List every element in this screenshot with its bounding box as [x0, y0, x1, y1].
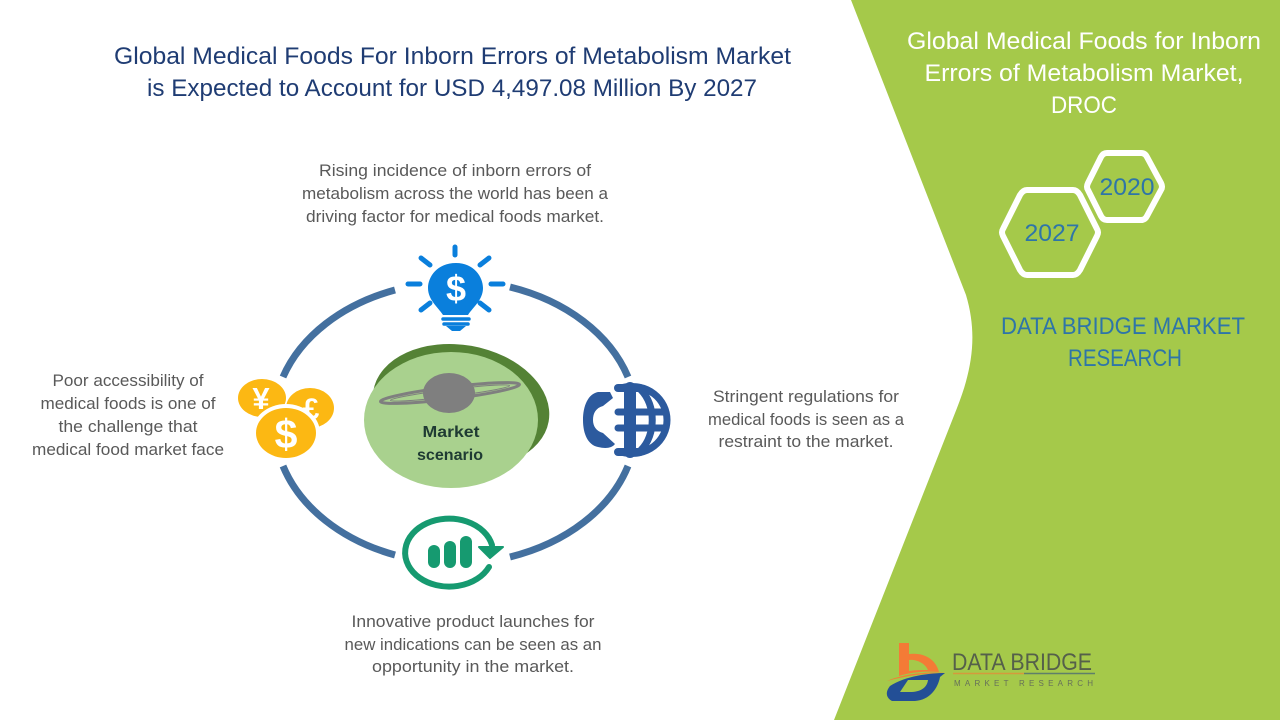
- logo: Data Bridge: DATA BRIDGE: [952, 649, 1092, 676]
- sidebar heading: Global Medical Foods for Inborn: [907, 28, 1261, 55]
- hexagon: 2027: [1002, 190, 1098, 275]
- hexagon: 2027: 2027: [1024, 220, 1080, 247]
- logo: Data Bridge: MARKET RESEARCH: [954, 679, 1093, 688]
- disc label: Market: [422, 424, 480, 441]
- icon: currency coins: ¥: [252, 381, 270, 416]
- logo: Data Bridge: [887, 643, 1095, 701]
- text: right restraint: medical foods is seen as a: [708, 410, 905, 429]
- disc label: scenario: [417, 447, 483, 464]
- planet rings: [380, 379, 520, 407]
- icon: currency coins: £: [303, 393, 320, 426]
- center: market scenario disc: [363, 330, 559, 488]
- hexagon: 2020: [1087, 153, 1162, 220]
- sidebar brand text: [1001, 313, 1245, 372]
- text: bottom opportunity: opportunity in the market.: [372, 657, 574, 676]
- disc label: [417, 424, 483, 464]
- text: bottom opportunity: Innovative product launches for: [352, 612, 595, 631]
- sidebar brand text: DATA BRIDGE MARKET: [1001, 313, 1245, 340]
- ring arcs: [283, 287, 628, 557]
- text: left challenge: Poor accessibility of: [52, 371, 204, 390]
- text: bottom opportunity: [344, 612, 602, 676]
- text: top driver: Rising incidence of inborn errors of: [319, 161, 591, 180]
- sidebar brand text: RESEARCH: [1068, 345, 1182, 372]
- text: right restraint: [708, 387, 905, 451]
- text: left challenge: medical food market face: [32, 440, 224, 459]
- text: top driver: driving factor for medical foods market.: [306, 207, 604, 226]
- text: top driver: metabolism across the world has been a: [302, 184, 609, 203]
- sidebar heading: Errors of Metabolism Market,: [924, 60, 1244, 87]
- hexagon: 2020: 2020: [1100, 174, 1154, 201]
- text: top driver: [302, 161, 609, 226]
- sidebar heading: DROC: [1051, 92, 1117, 119]
- planet: [423, 373, 475, 413]
- text: left challenge: [32, 371, 224, 459]
- icon: bar chart with circular arrow: [405, 519, 503, 587]
- text: right restraint: restraint to the market.: [718, 432, 894, 451]
- icon: currency coins: $: [275, 411, 298, 457]
- sidebar heading: [907, 28, 1261, 119]
- title: [114, 43, 791, 102]
- icon: currency coins: [238, 379, 334, 462]
- icon: light bulb with dollar: $: [446, 268, 466, 309]
- icon: light bulb with dollar: [408, 247, 503, 331]
- icon: phone and globe: [583, 387, 667, 453]
- text: left challenge: medical foods is one of: [40, 394, 216, 413]
- text: left challenge: the challenge that: [58, 417, 198, 436]
- panel: green sidebar: [834, 0, 1280, 720]
- text: right restraint: Stringent regulations for: [713, 387, 899, 406]
- text: bottom opportunity: new indications can be seen as an: [344, 635, 602, 654]
- title: Global Medical Foods For Inborn Errors of Metabolism Market: [114, 43, 791, 70]
- title: is Expected to Account for USD 4,497.08 Million By 2027: [147, 75, 757, 102]
